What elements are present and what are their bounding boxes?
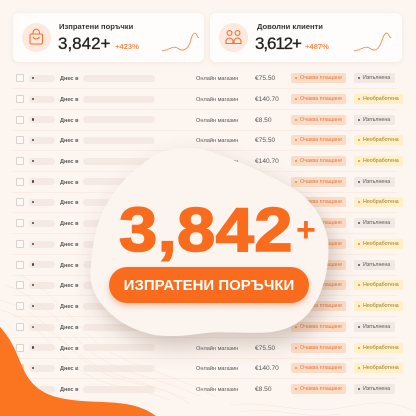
table of orders: Онлайн магазин: [196, 366, 238, 372]
table of orders: Очаква плащане: [300, 116, 342, 122]
table of orders: Необработена: [363, 199, 399, 205]
table of orders: Очаква плащане: [300, 241, 342, 247]
table of orders: Необработена: [363, 158, 399, 164]
table of orders: Днес в: [60, 387, 79, 393]
button label: ИЗПРАТЕНИ ПОРЪЧКИ: [124, 277, 294, 294]
table of orders: Онлайн магазин: [196, 200, 238, 206]
table of orders: Днес в: [60, 221, 79, 227]
table of orders: Изпълнена: [363, 220, 390, 226]
button label: [109, 267, 309, 303]
table of orders: Онлайн магазин: [196, 346, 238, 352]
table of orders: €8.50: [255, 178, 272, 186]
card: shipped orders: +423%: [115, 42, 139, 51]
table of orders: Очаква плащане: [300, 303, 342, 309]
table of orders: Очаква плащане: [300, 75, 342, 81]
table of orders: Онлайн магазин: [196, 304, 238, 310]
table of orders: Необработена: [363, 96, 399, 102]
sparkline: [162, 32, 200, 52]
table of orders: Очаква плащане: [300, 199, 342, 205]
table of orders: €8.50: [255, 303, 272, 310]
table of orders: €140.70: [255, 158, 279, 165]
table of orders: Онлайн магазин: [196, 387, 238, 393]
table of orders: €140.70: [255, 365, 279, 372]
card: happy clients: Доволни клиенти: [257, 22, 323, 31]
card: happy clients: 3,612+: [255, 34, 301, 53]
table of orders: Днес в: [60, 180, 79, 186]
table of orders: Очаква плащане: [300, 365, 342, 371]
card: happy clients: [210, 13, 402, 62]
table of orders: Необработена: [363, 282, 399, 288]
table of orders: €75.50: [255, 75, 275, 82]
table of orders: Онлайн магазин: [196, 262, 238, 268]
table of orders: €8.50: [255, 241, 272, 248]
table of orders: €8.50: [255, 386, 272, 393]
table of orders: Днес в: [60, 304, 79, 310]
table of orders: €75.50: [255, 324, 275, 331]
table of orders: Очаква плащане: [300, 158, 342, 164]
table of orders: Очаква плащане: [300, 178, 342, 184]
table of orders: Очаква плащане: [300, 262, 342, 268]
table of orders: Онлайн магазин: [196, 283, 238, 289]
sparkline: [354, 32, 392, 52]
table of orders: €75.50: [255, 199, 275, 206]
table of orders: Днес в: [60, 283, 79, 289]
table of orders: €75.50: [255, 137, 275, 144]
table of orders: Необработена: [363, 303, 399, 309]
table of orders: Днес в: [60, 159, 79, 165]
table of orders: Днес в: [60, 97, 79, 103]
table of orders: Днес в: [60, 242, 79, 248]
card: shipped orders: 3,842+: [58, 34, 110, 53]
table of orders: Очаква плащане: [300, 96, 342, 102]
table of orders: €75.50: [255, 344, 275, 352]
table of orders: Очаква плащане: [300, 220, 342, 226]
table of orders: Онлайн магазин: [196, 221, 238, 227]
table of orders: Днес в: [60, 366, 79, 372]
table of orders: Онлайн магазин: [196, 242, 238, 248]
table of orders: Онлайн магазин: [196, 118, 238, 124]
table of orders: Необработена: [363, 137, 399, 143]
table of orders: Днес в: [60, 138, 79, 144]
table of orders: Изпълнена: [363, 178, 390, 184]
table of orders: Изпълнена: [363, 324, 390, 330]
icon: people: [219, 23, 248, 52]
orange corner shape: [0, 327, 156, 416]
card: happy clients: +487%: [305, 42, 329, 51]
table of orders: Онлайн магазин: [196, 76, 238, 82]
table of orders: Днес в: [60, 346, 79, 352]
table of orders: Очаква плащане: [300, 282, 342, 288]
card: shipped orders: [13, 13, 204, 62]
table of orders: Онлайн магазин: [196, 159, 238, 165]
table of orders: Днес в: [60, 200, 79, 206]
plus sign: +: [296, 211, 316, 249]
table of orders: Очаква плащане: [300, 137, 342, 143]
table of orders: Очаква плащане: [300, 344, 342, 350]
big number: 3,842: [119, 196, 293, 265]
table of orders: Онлайн магазин: [196, 325, 238, 331]
table of orders: Днес в: [60, 325, 79, 331]
table of orders: Днес в: [60, 118, 79, 124]
table of orders: Днес в: [60, 76, 79, 82]
table of orders: Онлайн магазин: [196, 97, 238, 103]
table of orders: Изпълнена: [363, 75, 390, 81]
table of orders: Изпълнена: [363, 386, 390, 392]
table of orders: Онлайн магазин: [196, 138, 238, 144]
icon: shopping bag: [22, 23, 51, 52]
table of orders: €140.70: [255, 96, 279, 103]
table of orders: Необработена: [363, 365, 399, 371]
table of orders: €8.50: [255, 116, 272, 124]
table of orders: Необработена: [363, 241, 399, 247]
table of orders: €140.70: [255, 282, 279, 289]
card: shipped orders: Изпратени поръчки: [59, 22, 133, 31]
table of orders: Очаква плащане: [300, 386, 342, 392]
table of orders: Изпълнена: [363, 116, 390, 122]
table of orders: Необработена: [363, 344, 399, 350]
table of orders: Очаква плащане: [300, 324, 342, 330]
table of orders: Изпълнена: [363, 262, 390, 268]
table of orders: Днес в: [60, 262, 79, 268]
table of orders: €140.70: [255, 220, 279, 227]
table of orders: Онлайн магазин: [196, 180, 238, 186]
table of orders: €75.50: [255, 262, 275, 268]
